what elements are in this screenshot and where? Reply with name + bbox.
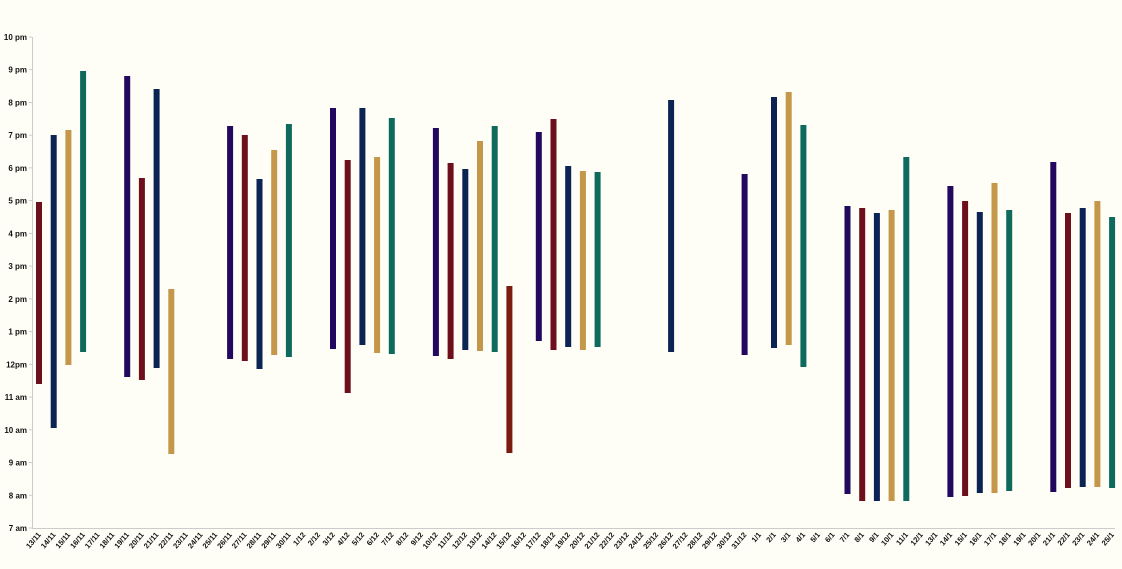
x axis: 18/11 [98,530,116,550]
x axis: 6/12 [365,530,381,547]
x axis: 24/12 [627,530,646,551]
x axis: 23/12 [612,530,631,551]
x axis: 17/12 [524,530,543,551]
x axis: 29/12 [700,530,719,551]
x axis: 30/11 [274,530,293,550]
x axis: 20/1 [1026,530,1042,547]
x axis: 27/11 [230,530,249,550]
x axis: 12/12 [450,530,469,551]
x axis: 18/12 [538,530,557,551]
x axis: 25/11 [201,530,219,550]
y axis: 8 am [9,491,27,500]
x axis: 13/11 [24,530,43,550]
y axis: 10 am [4,426,27,435]
x axis: 2/1 [764,530,778,544]
x axis: 22/12 [597,530,616,551]
x axis: 13/12 [465,530,484,551]
y axis: 5 pm [8,197,27,206]
x axis: 28/11 [245,530,263,550]
x axis [24,528,1116,551]
x axis: 19/12 [553,530,572,551]
x axis: 16/11 [68,530,87,550]
y axis: 11 am [5,393,27,402]
x axis: 5/12 [350,530,366,547]
x axis: 17/11 [83,530,102,550]
x axis: 15/11 [54,530,72,550]
y axis: 8 pm [8,98,27,108]
x axis: 4/12 [335,530,352,547]
x axis: 26/12 [656,530,675,551]
x axis: 22/1 [1056,530,1072,547]
x axis: 14/11 [39,530,58,550]
x axis: 15/1 [953,530,969,547]
x axis: 5/1 [808,530,822,544]
y axis: 2 pm [8,295,27,304]
x axis: 21/11 [142,530,160,550]
y axis: 10 pm [4,33,27,42]
x axis: 1/1 [750,530,763,544]
x axis: 28/12 [685,530,704,551]
y axis: 1 pm [8,328,27,337]
x axis: 27/12 [671,530,690,551]
x axis: 24/11 [186,530,205,550]
x axis: 25/1 [1100,530,1116,547]
y axis: 4 pm [8,229,27,238]
y axis: 9 am [9,458,27,468]
x axis: 18/1 [997,530,1013,547]
x axis: 29/11 [259,530,278,550]
x axis: 26/11 [215,530,234,550]
y axis: 3 pm [8,262,27,271]
x axis: 14/12 [480,530,499,551]
x axis: 20/12 [568,530,587,551]
x axis: 14/1 [938,530,954,547]
x axis: 16/1 [967,530,984,547]
y axis [4,33,32,533]
x axis: 23/1 [1070,530,1087,547]
x axis: 9/1 [867,530,881,544]
y axis: 7 am [9,524,27,533]
x axis: 1/12 [291,530,307,547]
x axis: 16/12 [509,530,528,551]
y axis: 12pm [6,360,27,369]
y axis: 9 pm [8,66,27,75]
y axis: 6 pm [8,164,27,173]
x axis: 11/1 [894,530,910,547]
x axis: 10/12 [421,530,440,551]
x axis: 13/1 [923,530,940,547]
x axis: 30/12 [715,530,734,551]
x axis: 9/12 [409,530,425,547]
x axis: 8/1 [852,530,866,544]
x axis: 19/1 [1011,530,1028,547]
x axis: 19/11 [112,530,131,550]
x axis: 22/11 [156,530,175,550]
x axis: 11/12 [436,530,454,550]
x axis: 12/1 [909,530,925,547]
x axis: 7/1 [838,530,851,544]
x axis: 7/12 [379,530,396,547]
y axis: 7 pm [8,131,27,140]
x axis: 25/12 [641,530,660,551]
x axis: 2/12 [306,530,322,547]
x axis: 8/12 [394,530,410,547]
bars [36,71,1115,501]
x axis: 21/12 [582,530,601,551]
x axis: 3/1 [779,530,793,544]
x axis: 3/12 [321,530,337,547]
x axis: 31/12 [729,530,748,551]
x axis: 4/1 [794,530,807,544]
x axis: 17/1 [982,530,998,547]
x axis: 6/1 [823,530,837,544]
x axis: 10/1 [879,530,895,547]
x axis: 21/1 [1041,530,1057,547]
x axis: 15/12 [494,530,513,551]
x axis: 23/11 [171,530,190,550]
x axis: 20/11 [127,530,146,550]
x axis: 24/1 [1085,530,1101,547]
